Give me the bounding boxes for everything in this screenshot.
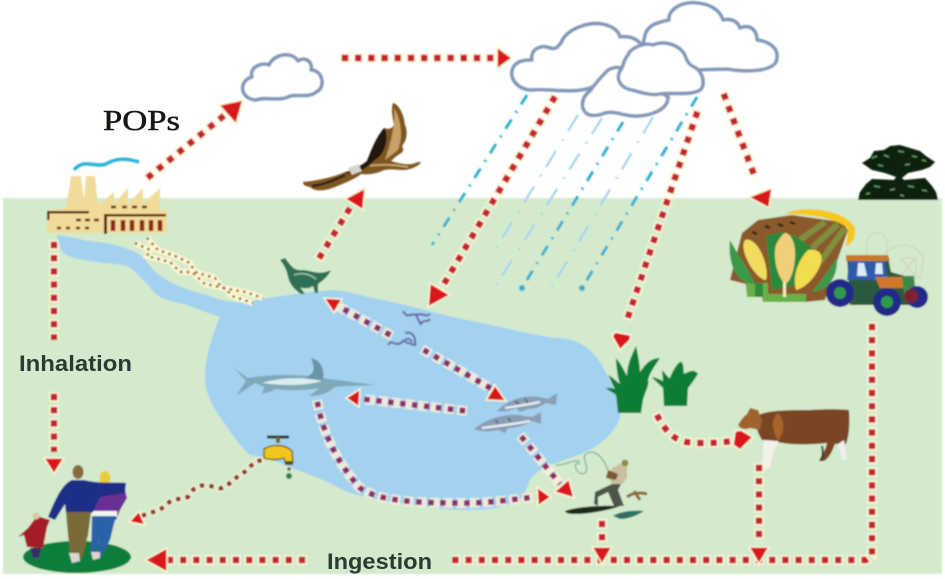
arrow: farm to ingestion line <box>452 322 872 560</box>
arrow: small cloud to storm cloud <box>340 47 512 69</box>
rain <box>432 95 697 295</box>
large storm cloud <box>512 3 777 116</box>
swordfish <box>234 358 376 396</box>
eagle <box>303 103 421 190</box>
label: Ingestion: Ingestion <box>327 549 432 574</box>
tractor <box>826 255 928 316</box>
farm crops <box>730 209 855 302</box>
tap <box>264 437 293 479</box>
arrow: storm cloud to lake <box>428 95 556 307</box>
arrow: fisherman down <box>592 519 612 564</box>
man <box>48 465 126 563</box>
tree <box>858 145 938 200</box>
child <box>18 512 50 558</box>
arrow: ingestion to people <box>145 548 307 572</box>
arrow: storm cloud to farm <box>723 92 772 208</box>
arrow: fish to swordfish <box>346 389 467 411</box>
ground panel <box>3 198 942 574</box>
people group <box>18 465 131 573</box>
arrow: fish to fisherman <box>520 435 574 498</box>
factory effluent dotted stream <box>135 238 263 303</box>
fisherman <box>556 452 647 519</box>
cow <box>738 408 849 470</box>
fish school <box>474 393 557 433</box>
arrow: bird to eagle <box>318 188 365 260</box>
arrow: factory to small cloud <box>146 100 243 179</box>
arrow: plankton to bird <box>324 298 392 336</box>
factory smoke <box>74 159 139 170</box>
river and lake <box>57 235 620 510</box>
plankton <box>388 311 430 345</box>
small bird <box>280 258 331 294</box>
factory <box>47 176 167 234</box>
barn outline <box>867 233 924 278</box>
small cloud <box>243 55 322 100</box>
arrow: grass to cow <box>656 413 753 450</box>
arrow: plankton to fish <box>422 349 506 401</box>
label: Inhalation: Inhalation <box>19 351 132 376</box>
arrow: swordfish to fisherman <box>317 400 551 506</box>
arrow: tap to people <box>129 460 263 525</box>
grass <box>605 346 698 413</box>
arrow: factory to people, lower <box>44 392 64 474</box>
woman <box>91 471 127 560</box>
arrow: storm cloud to grass <box>612 110 698 350</box>
arrow: cow down <box>749 463 769 564</box>
heading: POPs: POPs <box>103 105 180 137</box>
arrow: factory to people, upper <box>49 240 59 340</box>
